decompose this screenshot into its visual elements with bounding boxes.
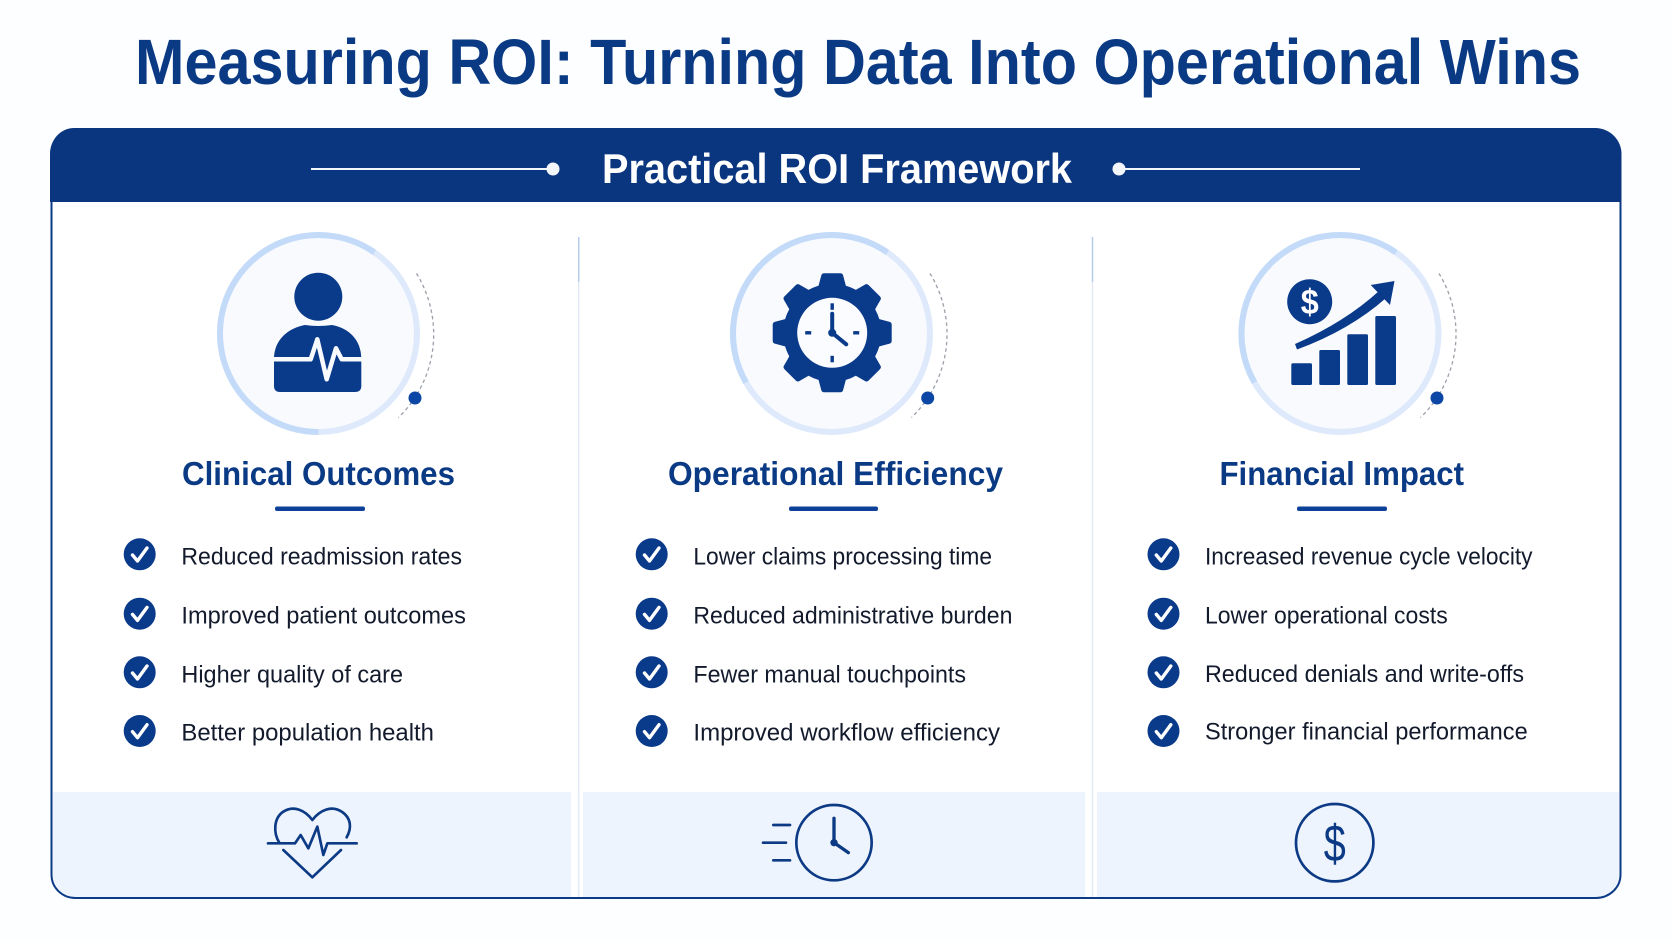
icon: growth chart with coin: $ [1301,283,1319,322]
icon: patient with heartbeat [220,235,434,432]
column: clinical outcomes [124,235,466,877]
column: operational efficiency [636,235,1012,880]
heading: operational efficiency: Operational Efficiency [668,455,1004,492]
band: financial footer [1097,792,1619,897]
icon: dollar circle [1296,804,1373,881]
column: financial impact [1148,235,1532,881]
list: operational items: Fewer manual touchpoints [693,662,966,689]
band: operational footer [583,792,1085,897]
list: clinical items: Higher quality of care [181,662,403,689]
band: clinical footer [53,792,571,897]
list: operational items: Improved workflow efficiency [693,720,1000,747]
panel border [52,202,1620,898]
list: financial items: Lower operational costs [1205,603,1448,630]
list: operational items: Lower claims processing time [693,543,992,570]
list: financial items: Reduced denials and write-offs [1205,661,1524,688]
panel: framework card [50,128,1622,898]
title: Measuring ROI: Turning Data Into Operational Wins [135,26,1581,98]
list: operational items: Reduced administrative burden [693,603,1012,630]
icon: gear with clock [733,235,947,432]
icon: dollar circle: $ [1324,815,1346,873]
list: clinical items: Reduced readmission rates [181,543,462,570]
list: operational items [636,538,1012,747]
list: clinical items: Improved patient outcomes [181,603,466,630]
heading: clinical outcomes: Clinical Outcomes [182,455,455,492]
list: financial items: Increased revenue cycle velocity [1205,543,1532,570]
icon: heart with pulse [268,809,357,877]
header title: Practical ROI Framework [602,145,1073,192]
list: financial items: Stronger financial performance [1205,719,1528,746]
header bar [50,128,1622,202]
heading underline [1297,506,1387,511]
list: clinical items: Better population health [181,720,434,747]
list: clinical items [124,538,466,747]
heading underline [275,506,365,511]
heading underline [789,506,878,511]
icon: fast clock [763,805,872,880]
icon: growth chart with coin [1241,235,1456,432]
heading: financial impact: Financial Impact [1220,455,1464,492]
list: financial items [1148,538,1532,747]
